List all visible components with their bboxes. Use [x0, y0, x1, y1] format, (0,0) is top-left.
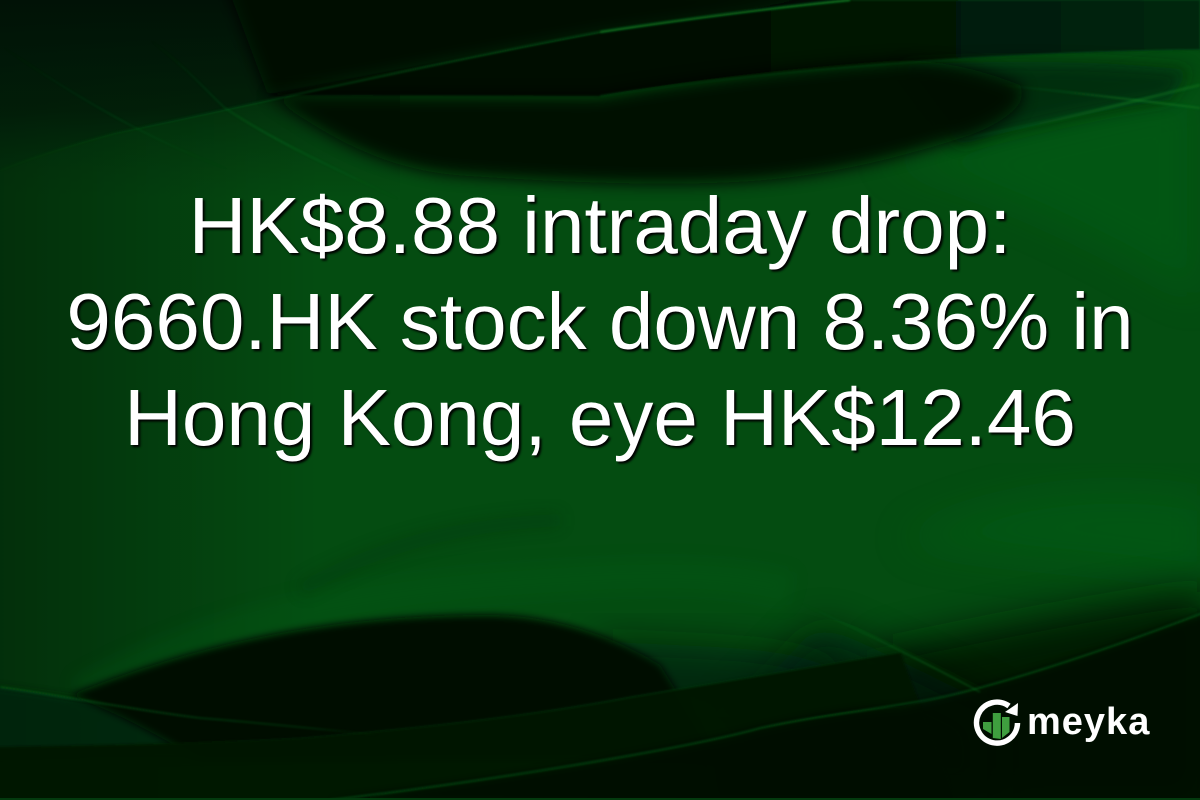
- title: [66, 181, 1134, 465]
- wordmark: meyka: [1027, 701, 1150, 743]
- logo: meyka: [974, 699, 1150, 746]
- title: 9660.HK stock down 8.36% in: [66, 277, 1134, 366]
- title: HK$8.88 intraday drop:: [189, 181, 1011, 270]
- icon: circular arrow with bars: [974, 699, 1020, 746]
- title: Hong Kong, eye HK$12.46: [124, 373, 1076, 462]
